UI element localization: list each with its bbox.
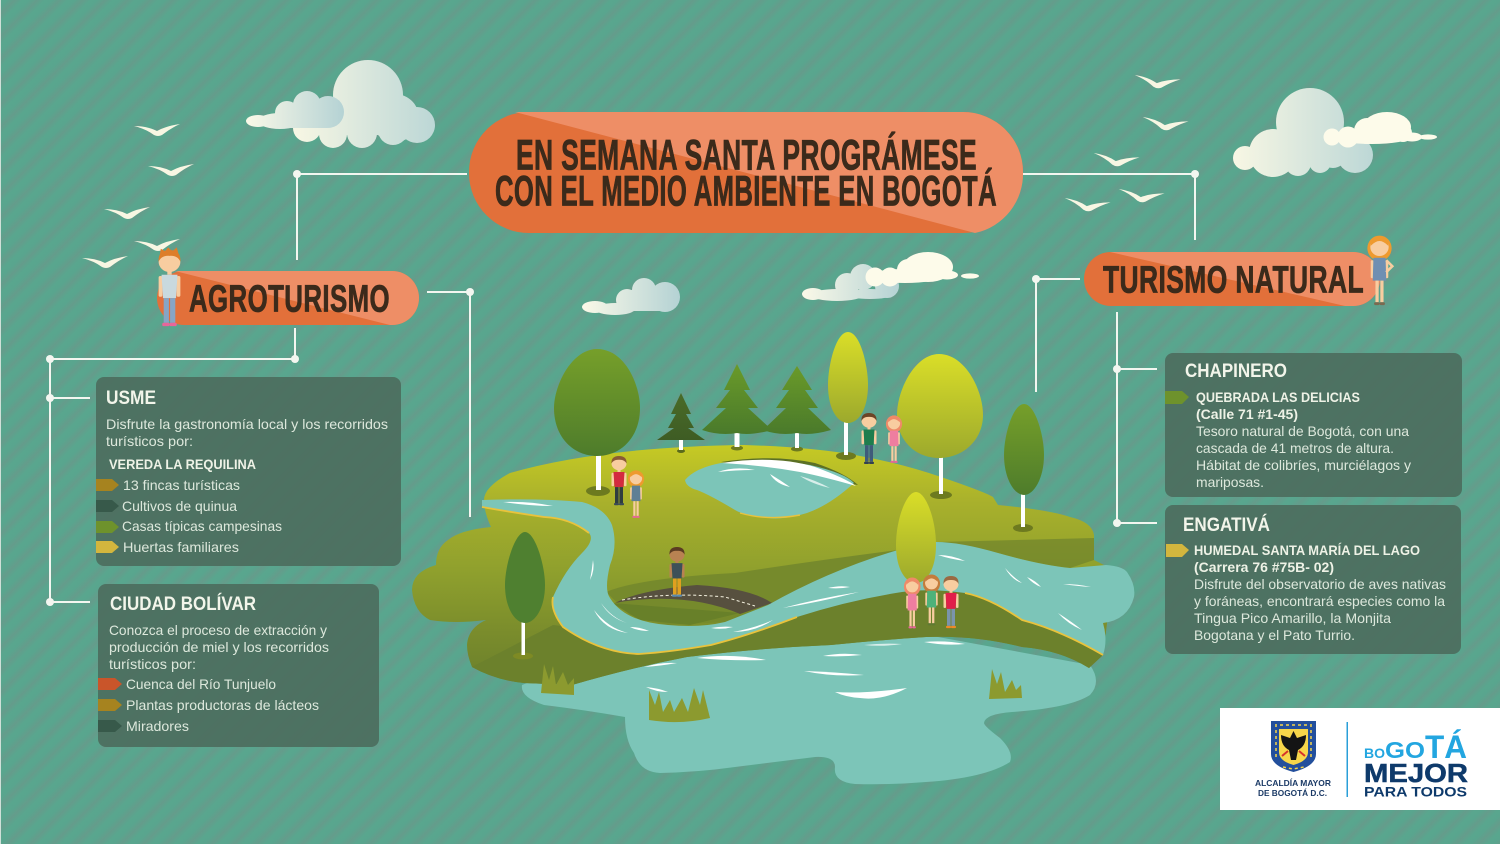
heading: chapinero: CHAPINERO — [1185, 361, 1287, 382]
bogota mejor para todos wordmark: BO — [1364, 745, 1385, 761]
dark ground band by the road — [606, 550, 898, 625]
title text: CON EL MEDIO AMBIENTE EN BOGOTÁ — [495, 168, 997, 216]
road — [612, 585, 772, 625]
ciudad bolivar list: Plantas productoras de lácteos — [126, 697, 319, 713]
marker: engativa — [1166, 544, 1189, 557]
panel: engativa — [1165, 505, 1461, 654]
heading: engativa: ENGATIVÁ — [1183, 514, 1270, 536]
dark lower ground — [472, 570, 1103, 685]
turismo natural banner — [1084, 252, 1380, 306]
character: girl by turismo natural — [1367, 236, 1392, 305]
agroturismo banner — [157, 271, 419, 325]
usme list: 13 fincas turísticas — [123, 477, 240, 493]
water highlights — [503, 502, 1091, 699]
chapinero text — [1196, 389, 1411, 490]
dark right ground — [936, 538, 1094, 568]
alcaldia text — [1255, 778, 1331, 798]
cloud: centre left — [582, 278, 680, 315]
birds: right flock — [1063, 73, 1189, 214]
marker: chapinero — [1165, 391, 1189, 404]
panel: usme — [96, 377, 401, 566]
chapinero text: (Calle 71 #1-45) — [1196, 406, 1298, 422]
landscape illustration — [412, 332, 1134, 784]
usme description: Disfrute la gastronomía local y los recorridos — [106, 416, 388, 432]
ciudad bolivar list — [98, 676, 319, 734]
ciudad bolivar description — [109, 622, 329, 672]
cloud: top left — [246, 60, 435, 148]
island ground — [412, 445, 1110, 685]
bogota mejor para todos wordmark: TÁ — [1425, 729, 1467, 765]
heading: ciudad bolivar: CIUDAD BOLÍVAR — [110, 593, 256, 615]
title text — [495, 132, 997, 216]
engativa text: HUMEDAL SANTA MARÍA DEL LAGO — [1194, 542, 1420, 558]
ciudad bolivar list: Cuenca del Río Tunjuelo — [126, 676, 276, 692]
bogota mejor para todos wordmark: MEJOR — [1364, 758, 1468, 788]
logo block — [1220, 708, 1500, 810]
panel: ciudad bolivar — [98, 584, 379, 747]
engativa text: Tingua Pico Amarillo, la Monjita — [1194, 610, 1391, 626]
panel: chapinero — [1165, 353, 1462, 497]
ciudad bolivar list: Miradores — [126, 718, 189, 734]
chapinero text: cascada de 41 metros de altura. — [1196, 440, 1394, 456]
title banner — [469, 112, 1023, 233]
usme list: Casas típicas campesinas — [122, 518, 282, 534]
bogota mejor para todos wordmark: PARA TODOS — [1364, 784, 1467, 800]
heading: usme: USME — [106, 388, 156, 409]
usme description — [106, 416, 388, 449]
ciudad bolivar description: producción de miel y los recorridos — [109, 639, 329, 655]
bogota mejor para todos wordmark — [1364, 729, 1468, 800]
people — [611, 413, 959, 628]
agroturismo heading: AGROTURISMO — [189, 278, 390, 320]
ciudad bolivar description: Conozca el proceso de extracción y — [109, 622, 327, 638]
alcaldia text: ALCALDÍA MAYOR — [1255, 778, 1331, 788]
pond — [685, 458, 858, 518]
subheading: vereda la requilina: VEREDA LA REQUILINA — [109, 456, 256, 472]
connector lines — [46, 170, 1199, 606]
cloud: centre right — [802, 252, 979, 301]
usme list — [96, 477, 282, 555]
lake — [522, 630, 1096, 784]
turismo natural heading: TURISMO NATURAL — [1103, 260, 1364, 302]
usme description: turísticos por: — [106, 433, 193, 449]
title text: EN SEMANA SANTA PROGRÁMESE — [516, 132, 977, 180]
icon: coat of arms — [1271, 721, 1316, 772]
cloud: top right — [1233, 88, 1437, 177]
engativa text: (Carrera 76 #75B- 02) — [1194, 559, 1334, 575]
usme list: Cultivos de quinua — [122, 498, 237, 514]
trees — [505, 332, 1044, 660]
bogota mejor para todos wordmark: GO — [1385, 737, 1425, 763]
chapinero text: mariposas. — [1196, 474, 1264, 490]
birds: left flock — [82, 124, 194, 268]
river — [482, 499, 1134, 655]
engativa text — [1194, 542, 1446, 643]
chapinero text: QUEBRADA LAS DELICIAS — [1196, 389, 1360, 405]
engativa text: y foráneas, encontrará especies como la — [1194, 593, 1445, 609]
ciudad bolivar description: turísticos por: — [109, 656, 196, 672]
usme list: Huertas familiares — [123, 539, 239, 555]
chapinero text: Tesoro natural de Bogotá, con una — [1196, 423, 1409, 439]
alcaldia text: DE BOGOTÁ D.C. — [1258, 788, 1327, 798]
character: boy by agroturismo — [159, 247, 180, 326]
grass tufts — [541, 664, 1022, 722]
chapinero text: Hábitat de colibríes, murciélagos y — [1196, 457, 1411, 473]
engativa text: Disfrute del observatorio de aves nativas — [1194, 576, 1446, 592]
engativa text: Bogotana y el Pato Turrio. — [1194, 627, 1355, 643]
